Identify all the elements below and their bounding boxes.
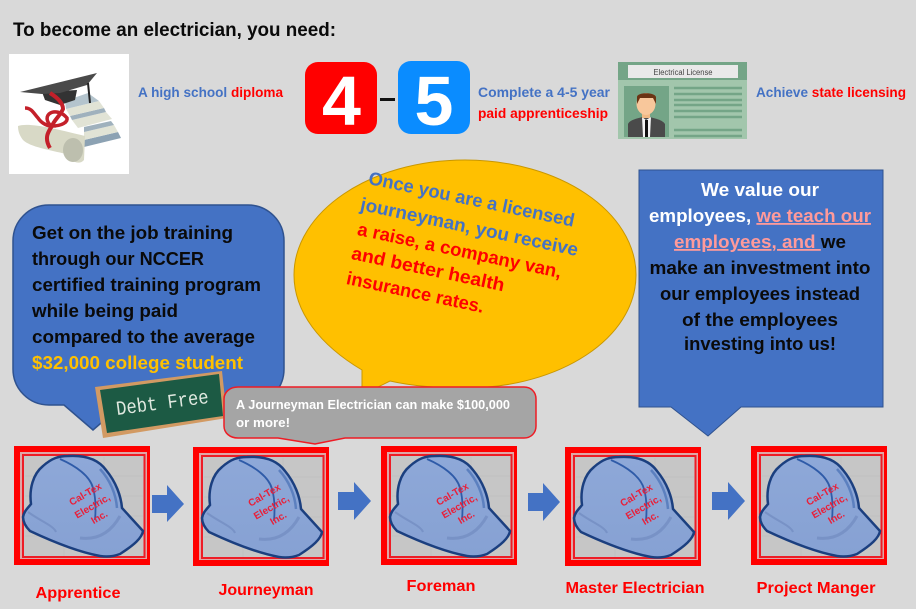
callout: on the job training: through our NCCER — [32, 249, 204, 269]
text: apprenticeship: Complete a 4-5 year — [478, 84, 611, 100]
callout: we value our employees: investing into us! — [684, 334, 836, 354]
callout: on the job training: $32,000 college student — [32, 353, 243, 373]
icon: number 5: 5 — [415, 62, 453, 140]
label: foreman: Foreman — [406, 578, 476, 595]
career step: project manager helmet: Cal-Tex — [805, 481, 841, 508]
career step: foreman helmet: Electric, — [440, 492, 480, 521]
chalkboard: debt free — [95, 371, 227, 438]
career step: master electrician helmet — [565, 447, 701, 566]
callout: on the job training: Get on the job training — [32, 223, 233, 243]
career step: master electrician helmet: Electric, — [624, 493, 664, 522]
career step: journeyman helmet — [193, 447, 329, 566]
callout: licensed journeyman — [294, 160, 636, 395]
career step: apprentice helmet: Inc. — [90, 509, 110, 527]
label: master electrician: Master Electrician — [566, 580, 704, 597]
career step: master electrician helmet: Inc. — [641, 510, 661, 528]
callout: on the job training — [13, 205, 284, 430]
callout: we value our employees: We value our — [701, 180, 819, 200]
callout: licensed journeyman: Once you are a licensed — [367, 167, 577, 231]
career step: journeyman helmet: Inc. — [269, 510, 289, 528]
label: project manger: Project Manger — [756, 580, 876, 597]
arrow — [338, 482, 371, 520]
callout: licensed journeyman: and better health — [350, 242, 507, 295]
callout: licensed journeyman: a raise, a company van, — [356, 218, 564, 282]
callout: on the job training: while being paid — [31, 301, 178, 321]
callout: we value our employees: make an investment into — [650, 258, 871, 278]
arrow — [712, 482, 745, 520]
career step: journeyman helmet: Cal-Tex — [247, 482, 283, 509]
dash between numbers — [380, 98, 395, 101]
callout: on the job training: certified training program — [32, 275, 261, 295]
label: journeyman: Journeyman — [218, 582, 314, 599]
text: high school diploma: A high school diploma — [138, 84, 283, 100]
career step: foreman helmet: Cal-Tex — [435, 481, 471, 508]
career step: project manager helmet — [751, 446, 887, 565]
icon: number 4 — [305, 62, 377, 140]
icon: graduation cap, books and diploma — [9, 54, 129, 174]
callout: we value our employees — [639, 170, 883, 436]
career step: apprentice helmet: Electric, — [73, 492, 113, 521]
career step: project manager helmet: Inc. — [827, 509, 847, 527]
callout: we value our employees: of the employees — [682, 310, 838, 330]
callout: licensed journeyman: insurance rates. — [345, 267, 486, 317]
career step: journeyman helmet: Electric, — [252, 493, 292, 522]
text: apprenticeship: paid apprenticeship — [478, 105, 608, 121]
icon: number 5 — [398, 61, 470, 140]
career step: foreman helmet — [381, 446, 517, 565]
arrow — [528, 483, 560, 521]
callout: on the job training: compared to the average — [32, 327, 255, 347]
callout: we value our employees: employees, we teach our — [649, 206, 871, 226]
icon: electrical license card: Electrical License — [654, 68, 713, 77]
callout: journeyman pay — [224, 387, 536, 444]
career step: foreman helmet: Inc. — [457, 509, 477, 527]
text: state licensing: Achieve state licensing — [756, 84, 906, 100]
callout: licensed journeyman: journeyman, you receive — [358, 193, 580, 260]
chalkboard: debt free: Debt Free — [115, 387, 210, 422]
icon: electrical license card — [618, 62, 747, 139]
text: apprenticeship — [478, 84, 611, 121]
callout: we value our employees: our employees instead — [660, 284, 860, 304]
callout: we value our employees: employees, and we — [674, 232, 846, 252]
label: apprentice: Apprentice — [36, 585, 121, 602]
career step: master electrician helmet: Cal-Tex — [619, 482, 655, 509]
career step: project manager helmet: Electric, — [810, 492, 850, 521]
title: To become an electrician, you need: — [13, 20, 336, 41]
callout: journeyman pay: A Journeyman Electrician can make $100,000 — [236, 398, 510, 412]
career step: apprentice helmet — [14, 446, 150, 565]
icon: number 4: 4 — [322, 62, 361, 140]
arrow — [152, 485, 184, 522]
career step: apprentice helmet: Cal-Tex — [68, 481, 104, 508]
callout: journeyman pay: or more! — [236, 416, 290, 430]
